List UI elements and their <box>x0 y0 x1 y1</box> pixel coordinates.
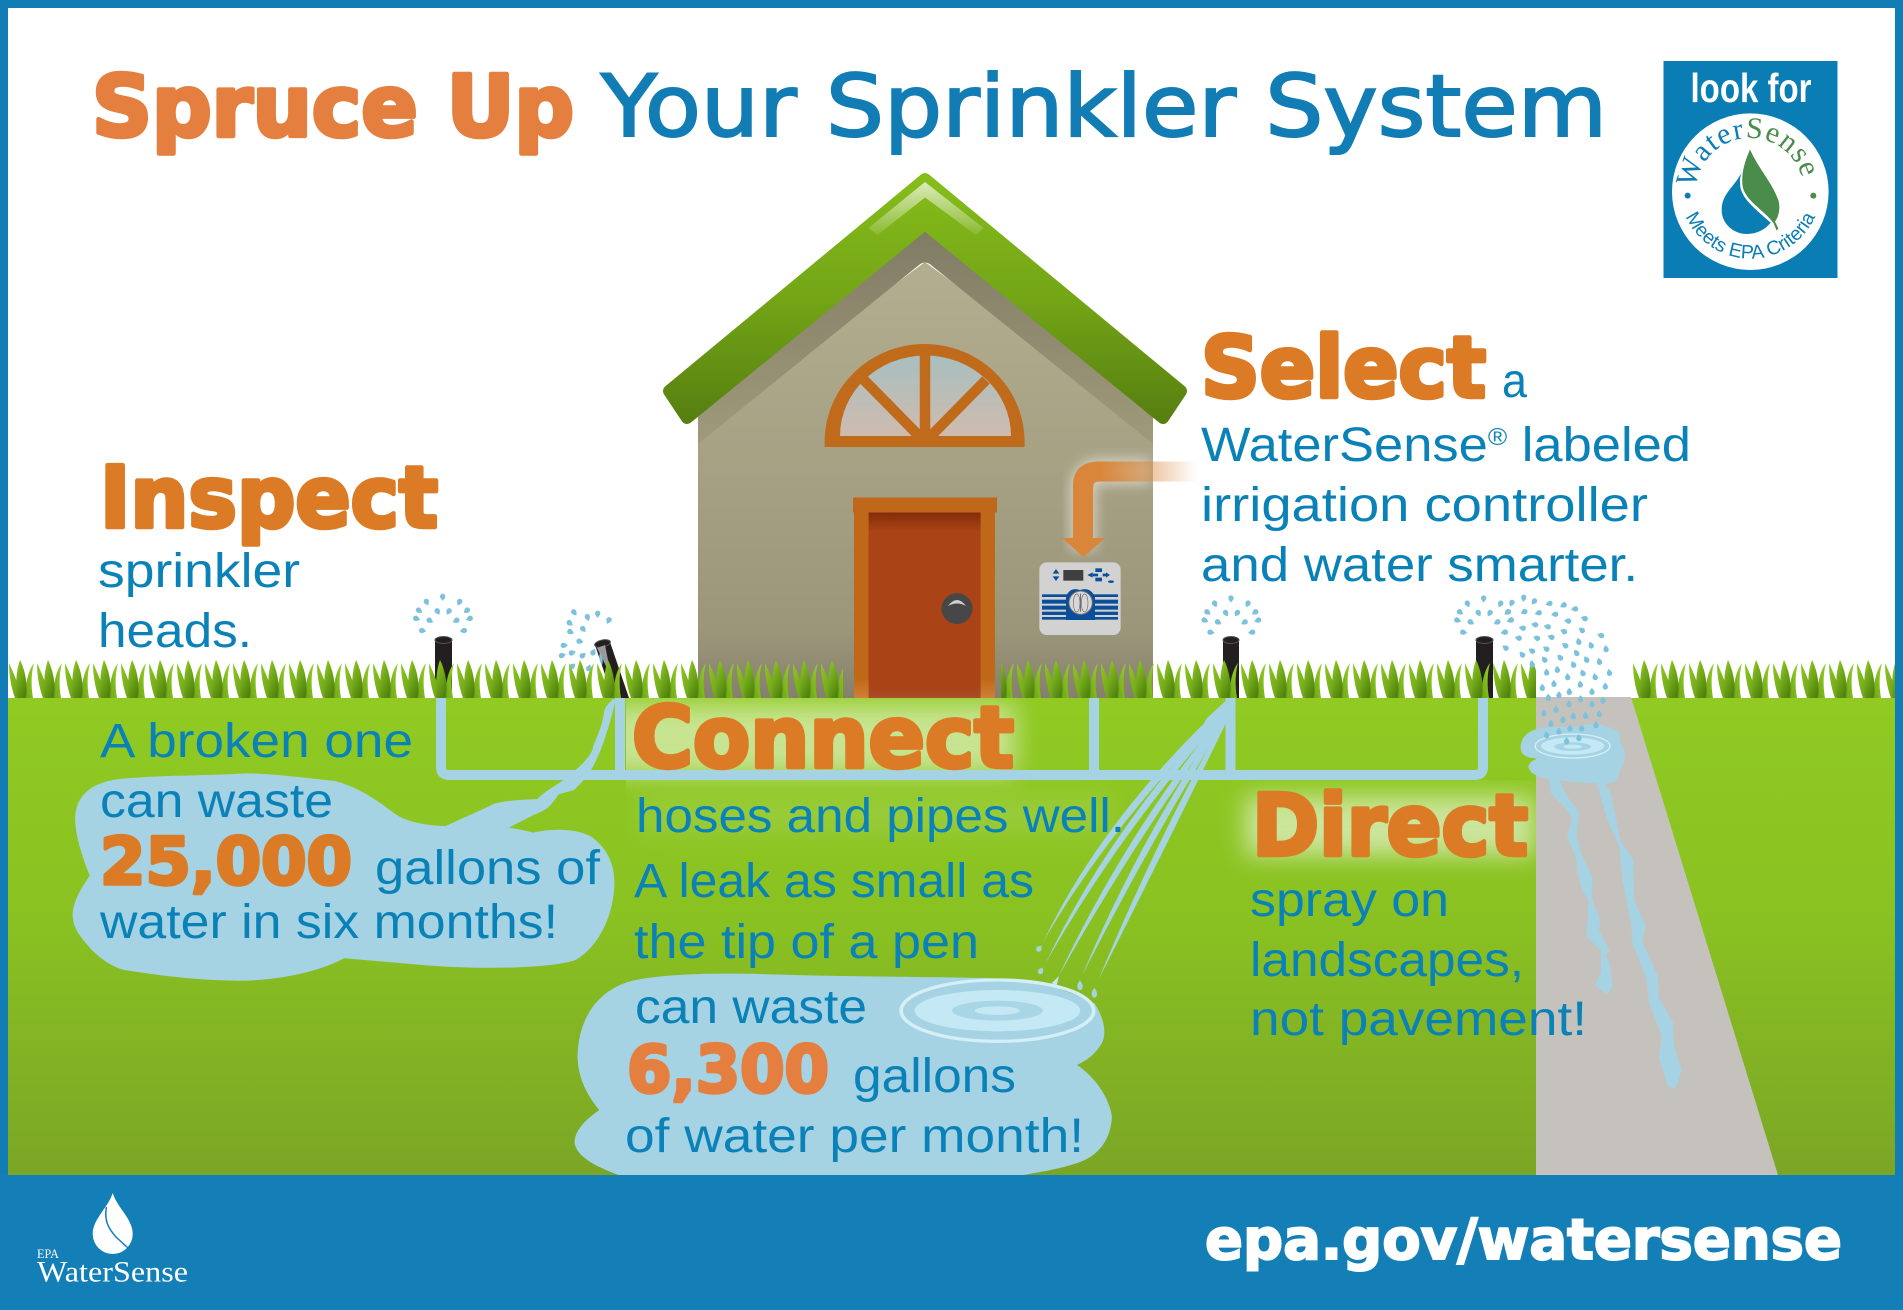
leak puddle: pipe connection <box>575 974 1112 1180</box>
water spray broken head 2 <box>558 608 613 672</box>
text: Select: irrigation controller <box>1201 479 1648 532</box>
text: Inspect: can waste <box>100 775 333 828</box>
badge: look for WaterSense <box>1664 61 1838 278</box>
grass strip right <box>1630 660 1895 698</box>
text: Direct: Direct <box>1252 777 1528 876</box>
water spray head 1 <box>412 594 474 634</box>
arrow to controller <box>1062 462 1197 557</box>
text: Inspect: heads. <box>98 605 252 658</box>
text: Inspect: sprinkler <box>98 545 300 598</box>
text: Direct: spray on <box>1250 874 1449 927</box>
puddle with runoff on sidewalk <box>1521 724 1681 1088</box>
footer logo: EPA WaterSense: EPA <box>37 1246 60 1261</box>
broken sprinkler head 2 <box>594 638 629 698</box>
footer bar <box>0 1175 1903 1310</box>
text: Connect: the tip of a pen <box>634 916 979 969</box>
text: Select: labeled <box>1507 419 1691 472</box>
text: Inspect: 25,000 <box>100 825 352 900</box>
irrigation pipes <box>441 698 1483 775</box>
text: Select: Select <box>1201 319 1486 418</box>
text: Direct: not pavement! <box>1250 993 1587 1046</box>
text: Select: a <box>1502 355 1527 408</box>
text: Inspect: Inspect <box>100 449 438 548</box>
overspray droplets from head 4 <box>1500 594 1613 744</box>
grass strip middle <box>1001 660 1536 698</box>
front door <box>853 498 997 698</box>
footer logo: EPA WaterSense <box>37 1193 188 1288</box>
sidewalk <box>1536 697 1778 1175</box>
water spray head 3 <box>1201 595 1262 636</box>
text: Connect: hoses and pipes well. <box>636 790 1125 843</box>
sprinkler head 3 <box>1223 636 1239 698</box>
white sky panel <box>8 8 1895 698</box>
water spray head 4 base <box>1453 595 1515 636</box>
footer url: epa.gov/watersense <box>1205 1208 1842 1273</box>
text: Connect <box>625 689 1125 1163</box>
text: Select <box>1201 319 1691 592</box>
green lawn <box>8 698 1895 1175</box>
leak puddle: broken sprinkler <box>73 698 615 981</box>
title <box>92 57 1607 157</box>
text: Connect: of water per month! <box>625 1110 1084 1163</box>
text: Connect: 6,300 <box>627 1033 829 1108</box>
badge: look for WaterSense: WaterSense <box>1676 118 1814 182</box>
text: Select: WaterSense <box>1201 419 1463 472</box>
text: Connect: gallons <box>853 1050 1016 1103</box>
arched window <box>825 344 1025 447</box>
sprinkler head 4 <box>1476 636 1493 698</box>
grass strip left <box>8 660 843 698</box>
shadow under the roof <box>698 222 1153 444</box>
irrigation controller <box>1039 562 1121 635</box>
sprinkler head 1 <box>435 636 452 698</box>
title: Spruce Up <box>92 58 574 157</box>
text: Select: and water smarter. <box>1201 539 1638 592</box>
house wall <box>698 262 1153 698</box>
glow behind Direct <box>1245 796 1535 856</box>
leaking water jets <box>1035 700 1235 998</box>
text: Select: ® <box>1488 424 1508 451</box>
text: Inspect: water in six months! <box>99 896 558 949</box>
text: Direct: landscapes, <box>1250 934 1524 987</box>
text: Inspect: A broken one <box>100 715 413 768</box>
title: Your Sprinkler System <box>600 57 1607 157</box>
badge: look for WaterSense: Meets EPA Criteria <box>1686 211 1816 259</box>
text: Connect: can waste <box>635 981 867 1034</box>
roof <box>669 179 1181 418</box>
text: Connect: Connect <box>632 689 1014 788</box>
text: Direct <box>1250 777 1587 1046</box>
text: Inspect <box>98 449 601 949</box>
footer logo: EPA WaterSense: WaterSense <box>37 1256 188 1288</box>
text: Connect: A leak as small as <box>634 855 1034 908</box>
house <box>669 179 1181 698</box>
badge: look for WaterSense: look for <box>1690 65 1812 111</box>
glow behind Connect <box>606 704 1110 835</box>
text: Inspect: gallons of <box>375 842 601 895</box>
